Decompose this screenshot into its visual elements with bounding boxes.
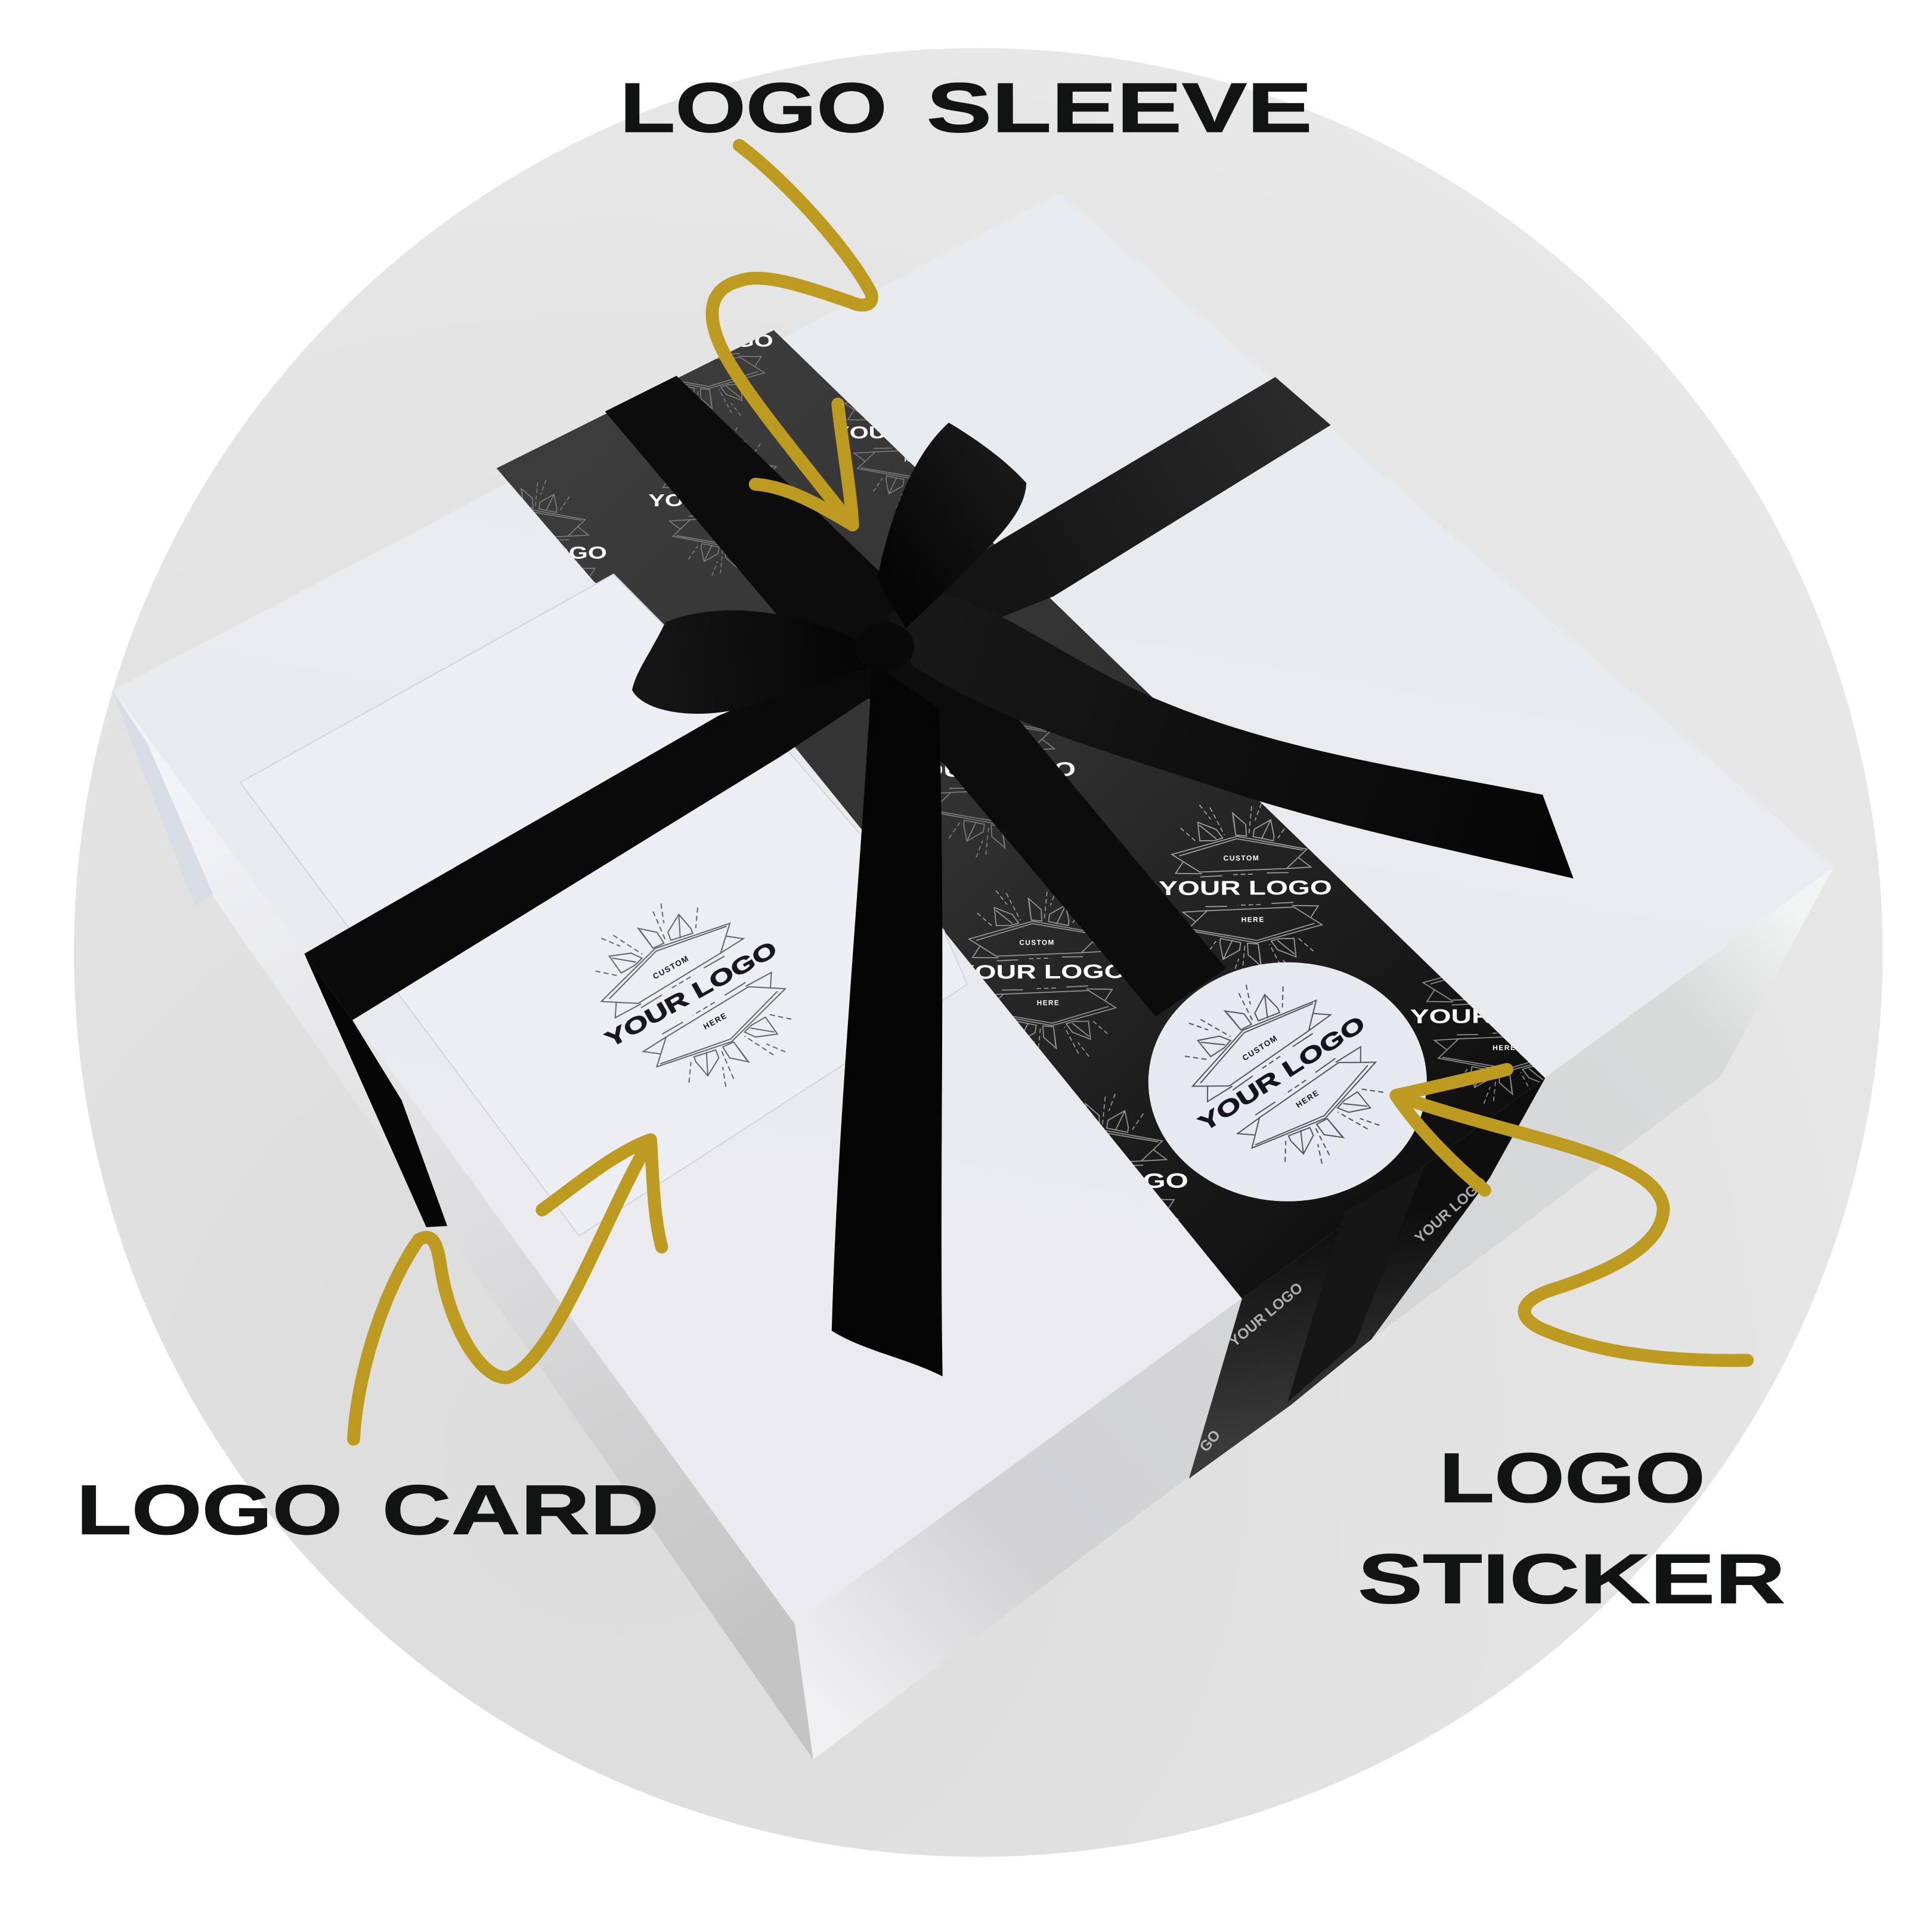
card logo	[595, 903, 791, 1086]
sleeve logo: top middle: YOUR LOGO	[648, 491, 798, 510]
card logo: HERE	[702, 1011, 729, 1031]
sleeve logo: left of ribbon	[967, 890, 1122, 1057]
sleeve logo: top edge	[599, 244, 801, 441]
side sleeve text left: YOUR LOGO	[1227, 1280, 1306, 1350]
bow loop left	[632, 611, 890, 714]
sticker logo: YOUR LOGO	[1194, 1011, 1369, 1136]
ribbon tail down	[832, 663, 943, 1376]
sleeve logo: right edge: YOUR LOGO	[1410, 1005, 1584, 1028]
logo card	[240, 574, 967, 1236]
sleeve logo: left of ribbon: CUSTOM	[1019, 939, 1055, 947]
arrow: logo sleeve	[712, 145, 872, 525]
bow knot	[855, 622, 914, 671]
ribbon down left side	[304, 953, 447, 1227]
ribbon tail right	[893, 590, 1574, 878]
label: logo sticker: STICKER	[1358, 1539, 1785, 1618]
sleeve logo: top right	[809, 335, 1010, 532]
sleeve logo: top right: YOUR LOGO	[833, 423, 983, 442]
sleeve logo: main: HERE	[1241, 915, 1265, 924]
sleeve logo: top edge: YOUR LOGO	[624, 332, 773, 351]
ribbon on side face	[1287, 1167, 1425, 1402]
sleeve logo: below knot: YOUR LOGO	[902, 758, 1076, 782]
logo sleeve on lid	[496, 330, 1546, 1299]
label: logo card: LOGO	[76, 1470, 342, 1549]
label: logo sleeve: SLEEVE	[927, 68, 1312, 147]
box magnetic flap	[112, 691, 213, 906]
ribbon band to the right	[887, 377, 1331, 653]
arrow: logo sticker	[1396, 1070, 1747, 1360]
sleeve logo: top middle: HERE	[720, 525, 740, 531]
box left side face	[113, 690, 813, 1760]
sleeve logo: right edge: HERE	[1493, 1044, 1516, 1052]
logo sleeve on side face	[1189, 1078, 1545, 1479]
sleeve logo: left of ribbon: HERE	[1037, 999, 1060, 1007]
label: logo sleeve: LOGO	[620, 68, 887, 147]
sleeve logo: main: YOUR LOGO	[1159, 877, 1332, 900]
sleeve logo: top left: YOUR LOGO	[457, 544, 607, 564]
sticker logo: CUSTOM	[1241, 1033, 1280, 1063]
sleeve logo: right edge	[1381, 903, 1615, 1132]
ribbon band along sleeve	[605, 376, 1226, 1017]
sticker logo: HERE	[1294, 1088, 1321, 1110]
sleeve logo: left of ribbon: YOUR LOGO	[956, 960, 1126, 983]
sleeve logo: lower left: YOUR LOGO	[1009, 1170, 1188, 1193]
gift box	[112, 193, 1834, 1760]
box lid	[113, 193, 1834, 1624]
sleeve logo: below knot	[874, 657, 1107, 886]
sleeve logo: top middle	[624, 402, 825, 600]
sleeve logo: main: CUSTOM	[1224, 854, 1259, 862]
sleeve logo pattern	[433, 244, 1615, 1302]
sticker logo	[1181, 977, 1388, 1172]
side sleeve text right: YOUR LOGO	[1412, 1174, 1490, 1246]
box right side face	[795, 868, 1834, 1760]
sleeve logo: top left	[433, 456, 634, 654]
side sleeve text low: GO	[1197, 1427, 1224, 1455]
label: logo sticker: LOGO	[1439, 1438, 1705, 1517]
bow loop top	[877, 423, 1026, 628]
sleeve logo: lower left	[979, 1064, 1221, 1302]
logo sticker	[1148, 962, 1427, 1202]
arrow: logo card	[354, 1140, 662, 1439]
card logo: YOUR LOGO	[600, 936, 781, 1052]
ribbon band to the lower left	[304, 653, 881, 1020]
sleeve logo: main	[1159, 803, 1331, 972]
label: logo card: CARD	[382, 1470, 659, 1549]
card logo: CUSTOM	[651, 953, 691, 981]
sleeve logo: top right: HERE	[905, 457, 925, 463]
